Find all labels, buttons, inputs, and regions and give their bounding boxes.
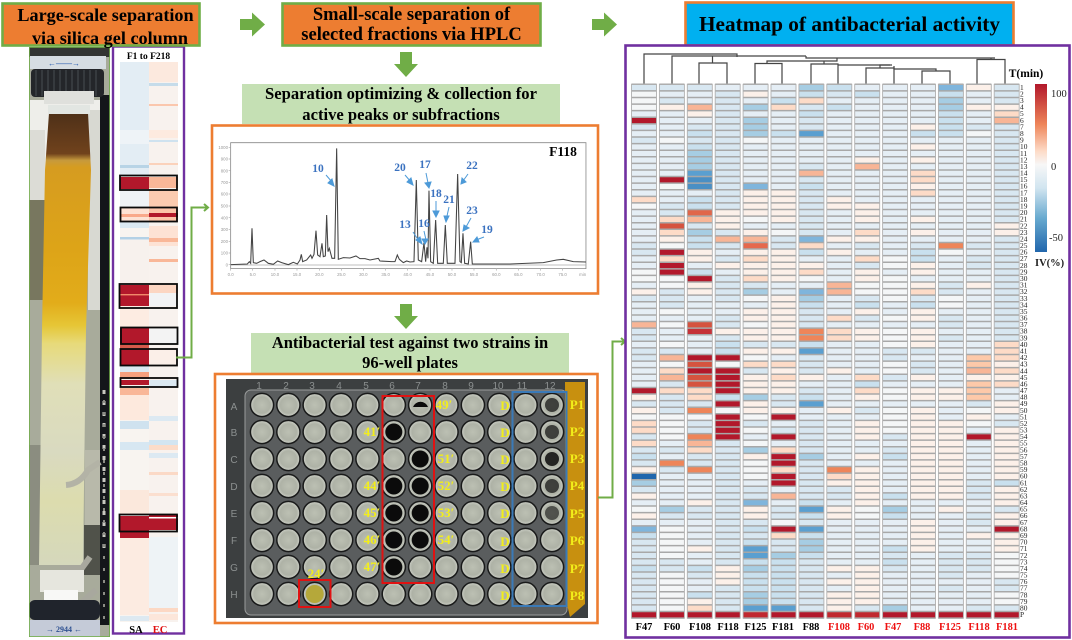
row labels 1 to 80 and P: 1	[1020, 83, 1024, 92]
row labels 1 to 80 and P: 52	[1020, 419, 1028, 428]
row labels 1 to 80 and P: 58	[1020, 459, 1028, 468]
panel: heatmap	[626, 46, 1070, 638]
column F60 red	[855, 84, 880, 618]
heading: separation optimizing	[242, 84, 560, 124]
chromatogram chart: 600	[221, 192, 229, 197]
plate column numbers: 3	[309, 381, 315, 392]
plate column numbers: 1	[256, 381, 262, 392]
chromatogram chart: min	[579, 272, 587, 277]
plate column numbers	[256, 381, 556, 392]
row labels 1 to 80 and P: 27	[1020, 254, 1028, 263]
chromatogram chart: 35.0	[381, 272, 390, 277]
plate column numbers: 6	[389, 381, 395, 392]
well labels: 52′	[438, 478, 454, 493]
column labels: F125	[745, 622, 766, 633]
plate column numbers: 5	[363, 381, 369, 392]
chromatogram chart: 65.0	[514, 272, 523, 277]
row labels 1 to 80 and P: 10	[1020, 142, 1028, 151]
well labels: D	[500, 398, 510, 413]
column F125	[743, 84, 768, 618]
row labels 1 to 80 and P: 73	[1020, 557, 1028, 566]
row labels 1 to 80 and P: 76	[1020, 577, 1028, 586]
arrow: to small-scale separation	[240, 12, 265, 36]
peak labels: 10	[312, 163, 324, 175]
strain labels: EC	[153, 625, 167, 636]
row labels 1 to 80 and P: 51	[1020, 412, 1028, 421]
well labels: 51′	[438, 451, 454, 466]
plate column numbers: 2	[283, 381, 289, 392]
heatmap column outlines	[632, 84, 1019, 618]
plate row letters: G	[230, 563, 238, 574]
row labels 1 to 80 and P: 59	[1020, 465, 1028, 474]
chromatogram chart: 60.0	[492, 272, 501, 277]
strain labels	[129, 625, 167, 636]
row labels 1 to 80 and P: 38	[1020, 327, 1028, 336]
strain labels: SA	[129, 625, 143, 636]
plate column numbers: 11	[517, 381, 528, 392]
well labels: P4	[570, 478, 585, 493]
dark active wells	[385, 398, 559, 576]
well labels: D	[500, 452, 510, 467]
plate row letters: B	[231, 428, 238, 439]
row labels 1 to 80 and P: 39	[1020, 333, 1028, 342]
chromatogram chart	[218, 143, 587, 277]
chromatogram chart: 50.0	[448, 272, 457, 277]
row labels 1 to 80 and P: 66	[1020, 511, 1028, 520]
row labels 1 to 80 and P: 80	[1020, 604, 1028, 613]
row labels 1 to 80 and P: 55	[1020, 439, 1028, 448]
chromatogram chart: 100	[221, 251, 229, 256]
row labels 1 to 80 and P: 12	[1020, 155, 1028, 164]
chromatogram chart: 400	[221, 215, 229, 220]
red highlight: column 6 and 7	[382, 396, 434, 583]
row labels 1 to 80 and P: 13	[1020, 162, 1028, 171]
peak labels: 16	[418, 218, 430, 230]
panel: column photograph: → 2944 ←	[46, 625, 82, 634]
row labels 1 to 80 and P: 75	[1020, 571, 1028, 580]
dendrogram	[644, 54, 1005, 84]
colour legend: 100	[1051, 89, 1067, 100]
chromatogram chart: 25.0	[337, 272, 346, 277]
column F108 red	[827, 84, 852, 618]
row labels 1 to 80 and P: 18	[1020, 195, 1028, 204]
well labels: 53′	[438, 505, 454, 520]
row labels 1 to 80 and P: 31	[1020, 281, 1028, 290]
chromatogram chart: 75.0	[558, 272, 567, 277]
row labels 1 to 80 and P: 72	[1020, 551, 1028, 560]
colour legend	[1035, 84, 1067, 269]
chromatogram chart: 500	[221, 204, 229, 209]
row labels 1 to 80 and P: 9	[1020, 136, 1024, 145]
row labels 1 to 80 and P: 20	[1020, 208, 1028, 217]
column labels: F118	[968, 622, 990, 633]
sample label F118: F118	[549, 144, 577, 159]
heading: small-scale separation: selected fractions via HPLC	[301, 25, 522, 45]
row labels 1 to 80 and P: 34	[1020, 300, 1028, 309]
arrow: down to antibacterial test	[394, 304, 418, 329]
row labels 1 to 80 and P: 57	[1020, 452, 1028, 461]
row labels 1 to 80 and P: 41	[1020, 346, 1028, 355]
red highlight: well H3	[299, 580, 330, 607]
chromatogram chart: 0.0	[228, 272, 234, 277]
arrow: fractions connector to HPLC	[176, 204, 208, 358]
row labels 1 to 80 and P: 50	[1020, 406, 1028, 415]
heading: separation optimizing: active peaks or subfractions	[302, 105, 500, 124]
row labels 1 to 80 and P: 45	[1020, 373, 1028, 382]
plate row letters: C	[230, 455, 238, 466]
plate row letters: H	[230, 590, 238, 601]
well labels: P8	[570, 588, 585, 603]
row labels 1 to 80 and P: 17	[1020, 188, 1028, 197]
row labels 1 to 80 and P: 15	[1020, 175, 1028, 184]
chromatogram chart: 1000	[218, 145, 229, 150]
arrow: down to peak collection	[394, 52, 418, 77]
peak labels: 17	[419, 159, 431, 171]
heading: antibacterial test	[251, 333, 569, 375]
well labels	[308, 397, 585, 603]
plate row letters: A	[231, 402, 238, 413]
plate row letters	[230, 402, 238, 601]
row labels 1 to 80 and P: 2	[1020, 89, 1024, 98]
arrow: plate connector to heatmap	[598, 338, 625, 498]
well labels: D	[500, 479, 510, 494]
peak labels: 23	[466, 205, 478, 217]
well labels: P3	[570, 451, 585, 466]
colour legend: IV(%)	[1035, 258, 1065, 269]
row labels 1 to 80 and P: 30	[1020, 274, 1028, 283]
panel: fraction heatmap F1 to F218	[113, 46, 184, 636]
peak labels	[312, 159, 493, 236]
row labels 1 to 80 and P: 53	[1020, 426, 1028, 435]
row labels 1 to 80 and P: 37	[1020, 320, 1028, 329]
well labels: D	[500, 534, 510, 549]
row labels 1 to 80 and P: 28	[1020, 261, 1028, 270]
row labels 1 to 80 and P: 70	[1020, 538, 1028, 547]
row labels 1 to 80 and P: 8	[1020, 129, 1024, 138]
colour legend: -50	[1049, 233, 1063, 244]
row labels 1 to 80 and P: 29	[1020, 267, 1028, 276]
row labels 1 to 80 and P: 47	[1020, 386, 1028, 395]
chromatogram chart: 15.0	[293, 272, 302, 277]
peak labels: 21	[443, 194, 455, 206]
plate column numbers: 4	[336, 381, 342, 392]
row labels 1 to 80 and P: 48	[1020, 393, 1028, 402]
row labels 1 to 80 and P: 63	[1020, 491, 1028, 500]
column labels: F181	[996, 622, 1018, 633]
well labels: D	[500, 561, 510, 576]
row labels 1 to 80 and P: 62	[1020, 485, 1028, 494]
well labels: 47′	[364, 559, 380, 574]
row labels 1 to 80 and P: 21	[1020, 215, 1028, 224]
row labels 1 to 80 and P: 36	[1020, 314, 1028, 323]
row labels 1 to 80 and P: 61	[1020, 478, 1028, 487]
row labels 1 to 80 and P: 3	[1020, 96, 1024, 105]
row labels 1 to 80 and P: P	[1020, 610, 1024, 619]
peak labels: 19	[481, 224, 493, 236]
row labels 1 to 80 and P: 6	[1020, 116, 1024, 125]
row labels 1 to 80 and P: 14	[1020, 169, 1028, 178]
column F47 red	[883, 84, 908, 618]
heading: heatmap of antibacterial activity	[686, 2, 1014, 46]
column labels: F88	[914, 622, 930, 633]
well labels: P2	[570, 424, 584, 439]
chromatogram chart: 55.0	[470, 272, 479, 277]
well labels: D	[500, 506, 510, 521]
plate row letters: E	[231, 509, 238, 520]
row labels 1 to 80 and P: 69	[1020, 531, 1028, 540]
row labels 1 to 80 and P: 19	[1020, 202, 1028, 211]
row labels 1 to 80 and P: 65	[1020, 505, 1028, 514]
row labels 1 to 80 and P: 5	[1020, 109, 1024, 118]
row labels 1 to 80 and P: 43	[1020, 360, 1028, 369]
plate photograph	[226, 379, 588, 618]
column labels: F47	[885, 622, 901, 633]
row labels 1 to 80 and P: 25	[1020, 241, 1028, 250]
chromatogram chart: 300	[221, 227, 229, 232]
row labels 1 to 80 and P: 67	[1020, 518, 1028, 527]
panel: column photograph	[29, 47, 110, 637]
row labels 1 to 80 and P: 64	[1020, 498, 1028, 507]
heading: large-scale separation: via silica gel column	[32, 28, 188, 48]
panel: column photograph: ←——→	[48, 59, 80, 68]
plate column numbers: 10	[492, 381, 504, 392]
column labels: F118	[717, 622, 739, 633]
heading: antibacterial test: 96-well plates	[362, 353, 458, 372]
well labels: 41′	[364, 424, 380, 439]
well labels: 54′	[438, 532, 454, 547]
chromatogram chart: 800	[221, 168, 229, 173]
chromatogram chart: 70.0	[536, 272, 545, 277]
heading: small-scale separation: Small-scale separation of	[313, 5, 511, 25]
blue highlight: positive controls	[512, 392, 566, 606]
colour legend: 0	[1051, 162, 1056, 173]
row labels 1 to 80 and P: 60	[1020, 472, 1028, 481]
column F118	[715, 84, 740, 618]
plate column numbers: 7	[415, 381, 421, 392]
row labels 1 to 80 and P: 79	[1020, 597, 1028, 606]
peak labels: 18	[430, 188, 442, 200]
column F47	[632, 84, 656, 618]
peak labels: 20	[394, 162, 406, 174]
row labels 1 to 80 and P: 77	[1020, 584, 1028, 593]
well labels: P5	[570, 506, 585, 521]
chromatogram chart: 40.0	[403, 272, 412, 277]
column F125 red	[938, 84, 963, 618]
well labels: 24′	[308, 566, 324, 581]
peak labels: 22	[466, 160, 478, 172]
plate column numbers: 12	[544, 381, 556, 392]
row labels 1 to 80 and P: 44	[1020, 366, 1028, 375]
column F181	[771, 84, 796, 618]
chromatogram chart: 0	[226, 262, 229, 267]
row labels 1 to 80 and P: 16	[1020, 182, 1028, 191]
heading: antibacterial test: Antibacterial test against two strains in	[272, 333, 548, 352]
row labels 1 to 80 and P: 71	[1020, 544, 1028, 553]
row labels 1 to 80 and P: 46	[1020, 379, 1028, 388]
heading: large-scale separation: Large-scale separation	[17, 5, 194, 25]
column F88	[799, 84, 824, 618]
well labels: P6	[570, 533, 585, 548]
column F181 red	[994, 84, 1019, 618]
heading: large-scale separation	[2, 4, 200, 48]
row labels 1 to 80 and P: 33	[1020, 294, 1028, 303]
chromatogram chart: 45.0	[426, 272, 435, 277]
column labels: F60	[858, 622, 874, 633]
chromatogram chart: 10.0	[271, 272, 280, 277]
well labels: 44′	[364, 478, 380, 493]
row labels 1 to 80 and P: 7	[1020, 122, 1024, 131]
well labels: 49′	[436, 397, 452, 412]
row labels 1 to 80 and P: 22	[1020, 221, 1028, 230]
row labels 1 to 80 and P: 42	[1020, 353, 1028, 362]
row labels 1 to 80 and P: 32	[1020, 287, 1028, 296]
column labels: F125	[939, 622, 961, 633]
row labels 1 to 80 and P: 74	[1020, 564, 1028, 573]
well labels: P7	[570, 561, 585, 576]
orange side strip	[565, 382, 585, 617]
well labels: P1	[570, 397, 584, 412]
heat cells	[632, 84, 1019, 618]
plate row letters: D	[230, 482, 238, 493]
column labels: F181	[772, 622, 794, 633]
heatmap grid lines	[632, 84, 1020, 618]
plate column numbers: 9	[468, 381, 474, 392]
row labels 1 to 80 and P: 4	[1020, 103, 1024, 112]
well labels: 45′	[364, 505, 380, 520]
row labels 1 to 80 and P: 11	[1020, 149, 1027, 158]
SA and EC fraction strips	[120, 62, 178, 622]
chromatogram chart: 20.0	[315, 272, 324, 277]
row labels 1 to 80 and P: 24	[1020, 234, 1028, 243]
heading: separation optimizing: Separation optimizing & collection for	[265, 84, 538, 103]
row labels 1 to 80 and P: 26	[1020, 248, 1028, 257]
T(min) axis title: T(min)	[1009, 68, 1043, 80]
chromatogram chart: 30.0	[359, 272, 368, 277]
panel: HPLC chromatogram	[212, 126, 598, 294]
chromatogram chart: 900	[221, 157, 229, 162]
row labels 1 to 80 and P: 35	[1020, 307, 1028, 316]
chromatogram chart: 200	[221, 239, 229, 244]
highlighted fraction boxes	[120, 176, 178, 532]
peak arrows	[326, 173, 484, 244]
yellow well H3	[306, 585, 324, 603]
heading: small-scale separation	[282, 4, 540, 46]
plate column numbers: 8	[442, 381, 448, 392]
row labels 1 to 80 and P: 68	[1020, 524, 1028, 533]
column F108	[687, 84, 712, 618]
column labels: F108	[689, 622, 711, 633]
column labels: F47	[636, 622, 652, 633]
column labels: F88	[803, 622, 819, 633]
column F88 red	[910, 84, 936, 618]
peak labels: 13	[399, 219, 411, 231]
row labels 1 to 80 and P: 78	[1020, 590, 1028, 599]
well labels: 46′	[364, 532, 380, 547]
chromatogram chart: 5.0	[250, 272, 256, 277]
arrow: to heatmap	[592, 12, 617, 36]
row labels 1 to 80 and P: 56	[1020, 445, 1028, 454]
column F60	[659, 84, 684, 618]
row labels 1 to 80 and P: 49	[1020, 399, 1028, 408]
panel: 96-well plate	[215, 374, 598, 623]
fraction label: F1 to F218	[127, 52, 170, 62]
chromatogram chart: 700	[221, 180, 229, 185]
row labels 1 to 80 and P: 40	[1020, 340, 1028, 349]
row labels 1 to 80 and P: 54	[1020, 432, 1028, 441]
heading: heatmap of antibacterial activity: Heatmap of antibacterial activity	[699, 12, 1000, 36]
well labels: D	[500, 425, 510, 440]
column labels: F108	[828, 622, 850, 633]
column labels	[636, 622, 1018, 633]
well labels: D	[500, 588, 510, 603]
column F118 red	[966, 84, 991, 618]
plate row letters: F	[231, 536, 237, 547]
column labels: F60	[664, 622, 680, 633]
row labels 1 to 80 and P: 23	[1020, 228, 1028, 237]
